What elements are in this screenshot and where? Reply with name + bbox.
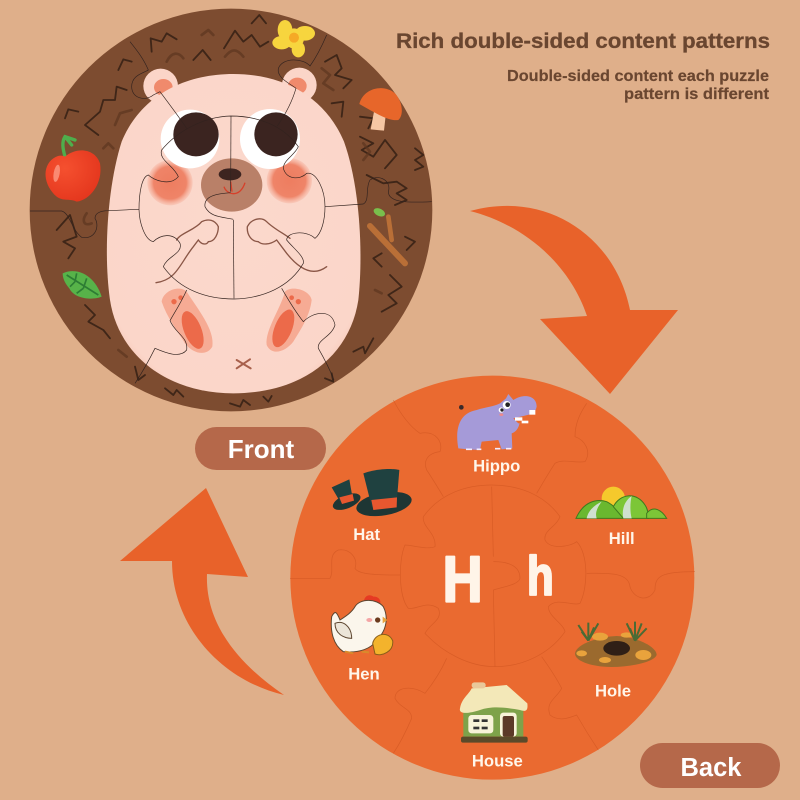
ear left (143, 69, 178, 103)
letter H h (443, 542, 554, 615)
label: House: House (472, 752, 523, 771)
arms (156, 219, 327, 283)
arrow: bottom left curved (120, 488, 284, 695)
faint spines (84, 30, 382, 357)
cheeks (147, 158, 312, 205)
label: Hen: Hen (348, 664, 380, 683)
label: Hole: Hole (595, 682, 631, 701)
eye right (240, 109, 300, 169)
spines (57, 15, 423, 407)
letter H h: h (527, 546, 554, 607)
ear right (282, 68, 317, 102)
icon: hill (576, 487, 667, 518)
label: Hill: Hill (609, 529, 635, 548)
eye left (161, 110, 219, 168)
heading: Rich double-sided content patterns (396, 30, 770, 53)
label: Hat: Hat (353, 525, 381, 544)
subheading text (507, 68, 769, 103)
belly button (237, 359, 251, 368)
puzzle seams (290, 400, 695, 753)
icon: mushroom (359, 88, 402, 131)
panel: front puzzle hedgehog (30, 9, 432, 411)
icon: leaf (63, 271, 102, 299)
pill: Back: Back (681, 754, 742, 782)
subheading text: pattern is different (624, 86, 769, 103)
label: Hippo: Hippo (473, 456, 520, 475)
icon: hole (575, 622, 657, 667)
subheading text: Double-sided content each puzzle (507, 68, 769, 85)
hedgehog body (107, 74, 360, 393)
pill: Front (195, 427, 326, 470)
pill: Back (640, 743, 780, 788)
arrow: top right curved (470, 206, 678, 394)
letter H h: H (443, 542, 483, 615)
icon: flower (272, 20, 315, 57)
foot left (162, 289, 213, 353)
pill: Front: Front (228, 434, 295, 464)
icon: twig (370, 206, 405, 263)
muzzle and nose (201, 158, 262, 212)
puzzle disc brown (30, 9, 432, 411)
puzzle disc orange (290, 376, 694, 780)
icon: hippo (457, 394, 537, 450)
icon: hats (331, 469, 414, 520)
icon: hen (331, 595, 393, 655)
puzzle seams (30, 35, 432, 383)
foot right (267, 289, 312, 352)
icon: house (460, 682, 528, 743)
panel: back puzzle letter H (290, 376, 695, 780)
icon: apple (46, 137, 101, 202)
